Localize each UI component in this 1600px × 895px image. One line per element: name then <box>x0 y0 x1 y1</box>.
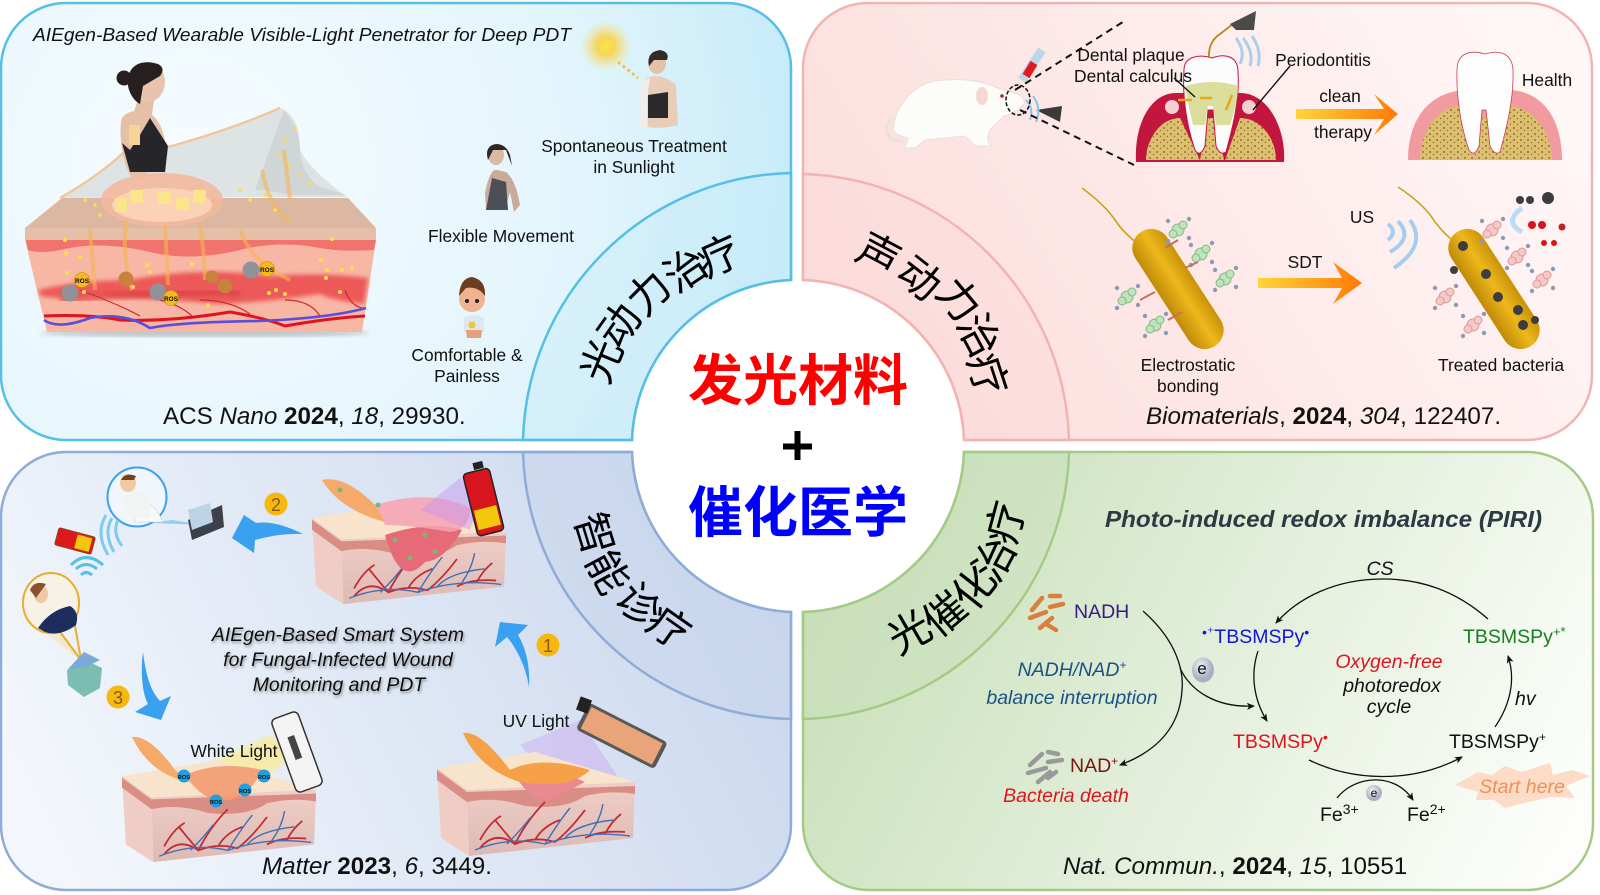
badge: 1 <box>536 634 560 656</box>
icon: red phone <box>54 527 96 555</box>
panel heading: smart system: Monitoring and PDT <box>253 674 426 696</box>
panel heading: wearable penetrator: AIEgen-Based Wearable Visible-Light Penetrator for Deep PDT <box>32 24 573 45</box>
panel heading: smart system: AIEgen-Based Smart System <box>212 624 464 646</box>
arrow: step 3 <box>135 652 171 720</box>
illustration: wound with UV light (step 1) <box>437 696 668 856</box>
illustration: bacterium with sensitizer <box>1082 188 1238 356</box>
citation: Matter: Matter 2023, 6, 3449. <box>262 853 492 880</box>
panel: photodynamic therapy <box>1 3 791 440</box>
label: flexible movement: Flexible Movement <box>428 226 574 246</box>
curved label: photodynamic therapy: 治 <box>650 231 718 305</box>
label: treated bacteria: Treated bacteria <box>1438 355 1564 375</box>
labels: dental plaque and calculus: Dental calculus <box>1074 66 1192 86</box>
label: periodontitis: Periodontitis <box>1275 50 1371 70</box>
label: CS: CS <box>1366 558 1394 580</box>
illustration: wound with phone (step 2) <box>312 461 506 604</box>
arrow: step 1 <box>495 622 529 687</box>
label: electrostatic bonding: Electrostatic <box>1141 355 1235 375</box>
label: US with waves <box>1350 207 1416 268</box>
illustration: wound with white light (step 3) <box>122 711 323 862</box>
badge: 3: 3 <box>113 688 123 708</box>
curved label: sonodynamic therapy: 治 <box>944 301 1018 367</box>
illustration: periodontitis tooth <box>1136 56 1284 162</box>
curved label: photocatalytic therapy: 疗 <box>968 494 1038 550</box>
callout: start here: Start here <box>1479 776 1565 798</box>
icon: ultrasonic probe near rat <box>1026 96 1062 122</box>
label: UV light: UV Light <box>503 711 570 731</box>
curved label: photodynamic therapy: 光 <box>563 329 635 391</box>
formula: excited state: TBSMSPy <box>1463 626 1553 648</box>
label: spontaneous treatment: Spontaneous Treatment <box>541 136 727 156</box>
formula: NAD+: + <box>1111 754 1118 768</box>
icon: wifi waves upper <box>101 515 122 555</box>
curved label: intelligent diagnosis: 智 <box>562 504 632 562</box>
curved label: sonodynamic therapy: 声 <box>847 215 913 289</box>
badge: 1: 1 <box>543 636 553 656</box>
label: bacteria death: Bacteria death <box>1003 785 1129 807</box>
label: oxygen-free photoredox cycle: photoredox <box>1342 675 1442 697</box>
illustration: woman moving <box>485 144 520 212</box>
icon: NAD bacteria <box>1028 752 1062 782</box>
formula: radical cation: •⁺ <box>1202 624 1214 640</box>
panel: intelligent diagnosis and therapy <box>1 452 791 890</box>
illustration: woman in sunlight <box>639 50 678 128</box>
curved label: photodynamic therapy <box>563 218 750 391</box>
illustration: woman on skin block: ROS <box>75 278 90 285</box>
formula: radical: • <box>1323 729 1328 745</box>
panel heading: PIRI: Photo-induced redox imbalance (PIRI) <box>1105 506 1542 532</box>
badge: 3 <box>106 686 130 708</box>
illustration: white rat <box>887 79 1024 148</box>
badge: 2: 2 <box>271 495 281 515</box>
curved label: sonodynamic therapy: 力 <box>924 262 998 334</box>
label: US with waves: US <box>1350 207 1374 227</box>
label: white light: White Light <box>190 741 278 761</box>
curved label: sonodynamic therapy: 动 <box>886 239 956 313</box>
icon: patient in bubble <box>23 573 102 697</box>
formula: NADH: NADH <box>1074 601 1129 623</box>
curved label: intelligent diagnosis: 诊 <box>603 567 677 639</box>
citation: Biomaterials: Biomaterials, 2024, 304, 122407. <box>1146 403 1501 430</box>
panel heading: smart system: for Fungal-Infected Wound <box>223 649 454 671</box>
illustration: cartoon boy <box>459 277 485 338</box>
curved label: sonodynamic therapy <box>847 215 1025 403</box>
curved label: photocatalytic therapy: 治 <box>955 525 1029 591</box>
label: oxygen-free photoredox cycle: Oxygen-free <box>1335 651 1443 673</box>
citation: ACS Nano: ACS Nano 2024, 18, 29930. <box>163 403 466 430</box>
label: NADH/NAD balance: + <box>1119 658 1126 672</box>
curved label: intelligent diagnosis: 能 <box>573 538 647 604</box>
formula: radical cation: TBSMSPy <box>1214 626 1304 648</box>
title line: catalytic medicine: 催化医学 <box>688 468 908 548</box>
label: comfortable and painless: Painless <box>434 366 500 386</box>
icon: dental scaler <box>1209 11 1256 58</box>
label: hv: hv <box>1515 688 1537 710</box>
illustration: treated bacterium <box>1398 187 1555 356</box>
label: electrostatic bonding: bonding <box>1157 376 1219 396</box>
center title <box>688 336 908 548</box>
icon: electron e small: e <box>1371 786 1378 800</box>
icon: doctor in bubble <box>108 468 224 540</box>
arrow: step 2 <box>232 515 303 553</box>
illustration: healthy tooth <box>1408 52 1562 160</box>
label: NADH/NAD balance: NADH/NAD <box>1018 659 1119 681</box>
formula: radical: TBSMSPy <box>1233 731 1323 753</box>
curved label: photodynamic therapy: 力 <box>611 255 683 327</box>
illustration: woman on skin block: ROS <box>260 267 275 274</box>
curved label: photocatalytic therapy: 化 <box>935 551 1009 621</box>
label: health: Health <box>1522 70 1572 90</box>
curved label: sonodynamic therapy: 疗 <box>955 345 1025 403</box>
reaction arrows <box>1120 579 1512 800</box>
icon: electron e <box>1192 658 1214 682</box>
illustration: wound with white light (step 3): ROS <box>239 789 251 795</box>
title line: luminescent materials: 发光材料 <box>688 336 908 416</box>
arrow: clean therapy: therapy <box>1314 122 1372 142</box>
formula: Fe2+: Fe <box>1407 804 1430 826</box>
arrow: SDT <box>1258 252 1362 304</box>
illustration: woman on skin block <box>25 62 376 337</box>
icon: electron e: e <box>1197 659 1207 678</box>
curved label: photocatalytic therapy: 光 <box>875 593 941 667</box>
arrow: SDT: SDT <box>1288 252 1323 272</box>
formula: Fe2+: 2+ <box>1430 801 1446 817</box>
illustration: wound with white light (step 3): ROS <box>210 800 222 806</box>
label: spontaneous treatment: in Sunlight <box>593 157 675 177</box>
formula: Fe3+: Fe <box>1320 804 1343 826</box>
labels: dental plaque and calculus: Dental plaque <box>1077 45 1185 65</box>
label: NADH/NAD balance: balance interruption <box>986 687 1158 709</box>
formula: ground state: TBSMSPy <box>1449 731 1539 753</box>
zoom lines <box>1006 20 1134 165</box>
panel: sonodynamic therapy <box>803 3 1592 440</box>
icon: wifi waves lower <box>71 558 103 575</box>
illustration: wound with white light (step 3): ROS <box>178 775 190 781</box>
callout: start here <box>1455 763 1590 808</box>
plus sign <box>783 431 812 460</box>
icon: reactive oxygen molecules <box>1512 192 1566 246</box>
icon: NADH bacteria <box>1030 596 1063 630</box>
illustration: wound with white light (step 3): ROS <box>258 775 270 781</box>
curved label: photocatalytic therapy <box>875 494 1038 667</box>
formula: radical cation: • <box>1304 624 1309 640</box>
label: oxygen-free photoredox cycle <box>1335 651 1443 718</box>
curved label: intelligent diagnosis: 疗 <box>635 588 705 662</box>
icon: ultrasound waves at scaler <box>1236 36 1259 66</box>
formula: excited state: +* <box>1553 624 1566 639</box>
illustration: woman on skin block: ROS <box>164 296 179 303</box>
badge: 2 <box>264 492 288 516</box>
icon: syringe <box>1022 50 1042 80</box>
arrow: clean therapy <box>1296 86 1398 142</box>
panel: photocatalytic therapy <box>803 452 1593 890</box>
curved label: photodynamic therapy: 疗 <box>686 218 750 290</box>
icon: electron e small <box>1366 785 1382 801</box>
formula: Fe3+: 3+ <box>1343 801 1359 817</box>
label: oxygen-free photoredox cycle: cycle <box>1367 696 1411 718</box>
formula: ground state: + <box>1539 730 1546 744</box>
formula: NAD+: NAD <box>1070 755 1111 777</box>
curved label: photodynamic therapy: 动 <box>580 289 654 359</box>
icon: sun <box>580 20 638 78</box>
curved label: intelligent diagnosis <box>562 504 705 662</box>
citation: Nature Communications: Nat. Commun., 2024, 15, 10551 <box>1063 853 1407 880</box>
label: comfortable and painless: Comfortable & <box>411 345 523 365</box>
curved label: photocatalytic therapy: 催 <box>907 575 979 649</box>
arrow: clean therapy: clean <box>1319 86 1361 106</box>
